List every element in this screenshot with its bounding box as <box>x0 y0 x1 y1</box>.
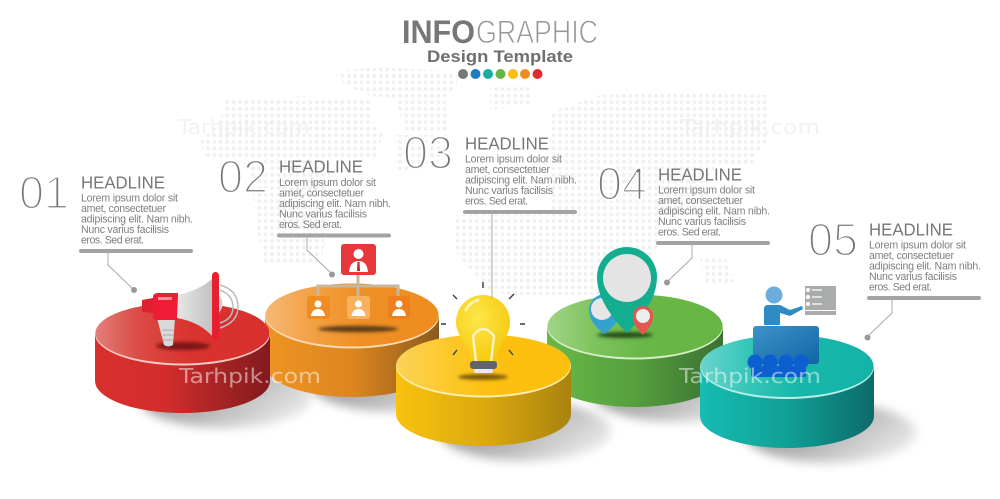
panel 04: green cylinder <box>547 294 723 407</box>
panel 02: orange cylinder <box>265 284 439 397</box>
block 02 <box>218 150 391 278</box>
title: Infographic Design Template <box>402 14 598 79</box>
watermarks: Tarhpik.com <box>177 115 310 139</box>
icon: org chart <box>307 244 410 332</box>
body text: eros. Sed erat. <box>658 226 721 238</box>
audience <box>748 354 808 377</box>
block 01 <box>19 166 193 293</box>
colour dots <box>458 69 542 79</box>
body text: Lorem ipsum dolor sit <box>279 177 376 189</box>
body text: eros. Sed erat. <box>869 282 932 294</box>
body text: adipiscing elit. Nam nibh. <box>658 206 770 218</box>
body text: Lorem ipsum dolor sit <box>81 192 178 204</box>
body text <box>81 192 193 246</box>
headline: HEADLINE <box>81 172 165 192</box>
icon: presenter and audience <box>748 286 836 377</box>
body text: amet, consectetuer <box>279 188 364 200</box>
body text: eros. Sed erat. <box>279 219 342 231</box>
panel 05: teal cylinder <box>700 335 874 448</box>
watermarks: Tarhpik.com <box>678 364 821 388</box>
left person box <box>307 296 330 319</box>
dotted world map background <box>200 68 770 295</box>
block 04 <box>597 158 770 286</box>
checklist board <box>805 286 836 315</box>
body text: adipiscing elit. Nam nibh. <box>869 260 981 272</box>
title word GRAPHIC: GRAPHIC <box>476 14 598 50</box>
leader line <box>463 210 577 298</box>
block 05 <box>808 214 981 340</box>
body text: amet, consectetuer <box>465 164 550 176</box>
watermarks: Tarhpik.com <box>178 364 321 388</box>
leader line <box>656 241 770 286</box>
icon: map pins <box>589 247 657 338</box>
panel: cylinder shadows <box>139 352 916 463</box>
leader line <box>864 296 981 340</box>
body text <box>465 154 577 208</box>
body text: adipiscing elit. Nam nibh. <box>279 198 391 210</box>
body text: eros. Sed erat. <box>465 196 528 208</box>
number 02: 02 <box>218 150 268 202</box>
body text: amet, consectetuer <box>869 250 954 262</box>
body text: Nunc varius facilisis <box>279 208 367 220</box>
body text: Nunc varius facilisis <box>869 271 957 283</box>
body text <box>869 240 981 294</box>
subtitle: Design Template <box>427 48 573 66</box>
body text: amet, consectetuer <box>81 203 166 215</box>
headline: HEADLINE <box>658 164 742 184</box>
panel 03: yellow cylinder <box>396 334 571 446</box>
number 03: 03 <box>403 126 453 178</box>
number 01: 01 <box>19 166 69 218</box>
body text <box>279 177 391 231</box>
icon: megaphone <box>142 272 238 350</box>
body text: Lorem ipsum dolor sit <box>658 184 755 196</box>
red pin <box>633 306 653 335</box>
body text: Nunc varius facilisis <box>465 185 553 197</box>
body text: adipiscing elit. Nam nibh. <box>465 174 577 186</box>
body text: amet, consectetuer <box>658 195 743 207</box>
leader line <box>277 234 391 278</box>
blue pin <box>589 294 621 334</box>
middle person box <box>347 296 370 319</box>
body text <box>658 184 770 238</box>
headline: HEADLINE <box>465 134 549 154</box>
watermarks: Tarhpik.com <box>679 115 820 139</box>
number 04: 04 <box>597 158 647 210</box>
watermarks <box>177 115 821 388</box>
body text: Lorem ipsum dolor sit <box>465 154 562 166</box>
body text: Nunc varius facilisis <box>81 224 169 236</box>
body text: adipiscing elit. Nam nibh. <box>81 214 193 226</box>
body text: eros. Sed erat. <box>81 234 144 246</box>
headline: HEADLINE <box>869 220 953 240</box>
right person box <box>388 296 410 319</box>
title word INFO: INFO <box>402 14 475 50</box>
body text: Nunc varius facilisis <box>658 216 746 228</box>
top person box <box>341 244 376 275</box>
block 03 <box>403 126 577 298</box>
headline: HEADLINE <box>279 156 363 176</box>
leader line <box>79 249 193 293</box>
body text: Lorem ipsum dolor sit <box>869 240 966 252</box>
panel 01: red cylinder <box>95 302 270 413</box>
icon: light bulb <box>441 282 525 380</box>
number 05: 05 <box>808 214 858 266</box>
green pin <box>597 247 657 333</box>
